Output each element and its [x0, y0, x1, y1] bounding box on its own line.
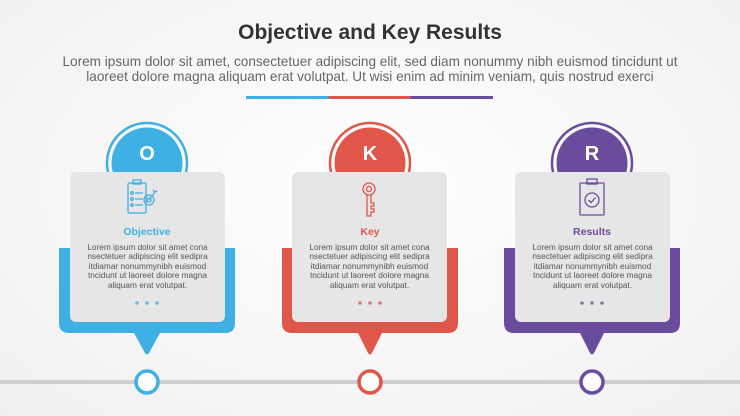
- text: key body: aliquam erat volutpat.: [330, 280, 409, 290]
- panel: key: K: [363, 143, 378, 165]
- text: key body: Lorem ipsum dolor sit amet cona: [309, 242, 430, 252]
- text: results body: nsectetuer adipiscing elit sedipra: [532, 251, 653, 261]
- title: Objective and Key Results: [238, 21, 502, 44]
- text: objective body: aliquam erat volutpat.: [108, 280, 187, 290]
- text: key body: tncidunt ut laoreet dolore magna: [310, 270, 429, 280]
- panel: results: R: [585, 143, 600, 165]
- text: results body: itdiamar nonummynibh euismod: [534, 261, 651, 271]
- panel: key: [282, 123, 458, 393]
- panel: objective: O: [139, 143, 155, 165]
- text: objective body: Lorem ipsum dolor sit amet cona: [87, 242, 208, 252]
- text: objective body: itdiamar nonummynibh euismod: [89, 261, 206, 271]
- panel: key: Key: [360, 226, 380, 238]
- text: objective body: nsectetuer adipiscing elit sedipra: [87, 251, 208, 261]
- text: results body: aliquam erat volutpat.: [553, 280, 632, 290]
- subtitle: [62, 54, 678, 84]
- icon: key: [363, 183, 375, 216]
- panel: objective: [59, 123, 235, 393]
- text: objective body: tncidunt ut laoreet dolore magna: [88, 270, 207, 280]
- text: objective body: [87, 242, 208, 290]
- text: results body: tncidunt ut laoreet dolore magna: [533, 270, 652, 280]
- text: results body: Lorem ipsum dolor sit amet cona: [532, 242, 653, 252]
- panel: results: [504, 123, 680, 393]
- text: key body: itdiamar nonummynibh euismod: [311, 261, 428, 271]
- subtitle: laoreet dolore magna aliquam erat volutpat. Ut wisi enim ad minim veniam, quis nostrud exerci: [86, 69, 654, 84]
- text: key body: [309, 242, 430, 290]
- text: results body: [532, 242, 653, 290]
- panel: results: Results: [573, 226, 611, 238]
- icon: clipboard target: [128, 180, 157, 213]
- color bar: [246, 96, 493, 99]
- subtitle: Lorem ipsum dolor sit amet, consectetuer adipiscing elit, sed diam nonummy nibh euismod tincidunt ut: [62, 54, 678, 69]
- panel: objective: Objective: [123, 226, 171, 238]
- icon: clipboard check: [580, 179, 604, 215]
- text: key body: nsectetuer adipiscing elit sedipra: [309, 251, 430, 261]
